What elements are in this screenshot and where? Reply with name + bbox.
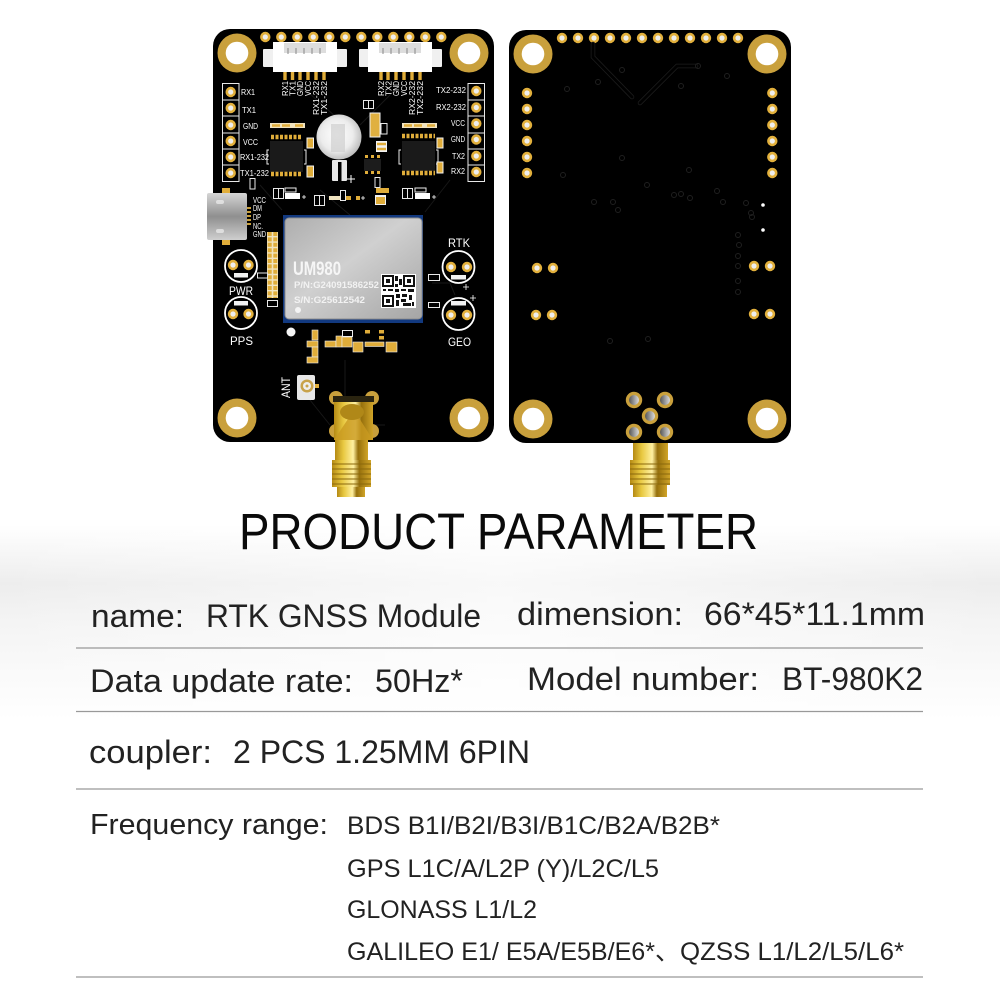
connector 1 (263, 42, 347, 80)
left pin header: VCC (243, 138, 258, 147)
right pin header: TX2-232 (436, 86, 467, 95)
SMD cluster (307, 330, 397, 363)
right pin header (436, 84, 484, 182)
left pin header (222, 84, 270, 182)
USB pin labels: DM (253, 204, 262, 213)
top edge pads (557, 33, 743, 43)
faint traces (260, 85, 455, 425)
connector 1 pin labels: RX1-232 (312, 80, 321, 115)
text block: data update rate: Data update rate: (90, 663, 353, 699)
back traces (593, 44, 696, 103)
text block: frequency range (90, 809, 904, 966)
right side pads (767, 88, 778, 178)
left pin header: TX1 (242, 106, 257, 115)
part number: P/N:G24091586252 (294, 280, 379, 290)
USB pin labels: DP (253, 213, 261, 222)
right pin header: GND (451, 135, 465, 144)
divider (76, 710, 923, 712)
left IC chip (267, 123, 306, 174)
ANT IPEX connector (279, 375, 319, 400)
text block: frequency range: GALILEO E1/ E5A/E5B/E6* (347, 938, 655, 966)
text block: dimension: dimension: (517, 596, 683, 632)
LED PPS (225, 297, 257, 348)
connector 1 pin labels: VCC (304, 81, 313, 96)
panel: PCB front view (207, 29, 494, 497)
gold pin array (267, 232, 278, 306)
connector 2 pin labels: VCC (400, 81, 409, 96)
SMA connector back (630, 440, 670, 497)
LED PPS: PPS (230, 334, 253, 348)
text block: dimension (517, 596, 925, 632)
USB pin labels: VCC (253, 196, 266, 205)
text block: frequency range: Frequency range: (90, 809, 328, 841)
USB pin labels: GND (253, 230, 266, 239)
USB-C connector (207, 188, 251, 245)
right pin header: VCC (451, 119, 465, 128)
connector 1 pin labels: TX1 (288, 80, 298, 96)
title: PRODUCT PARAMETER (239, 503, 758, 560)
mounting holes (514, 34, 786, 438)
connector 2 pin labels: GND (392, 81, 401, 96)
left side pads (522, 88, 532, 178)
text block: coupler: coupler: (89, 734, 212, 770)
small outlined parts (258, 273, 440, 308)
text block: model number: Model number: (527, 661, 759, 697)
right IC chip (399, 123, 438, 173)
pin 1 dot (295, 307, 301, 313)
text block: name: RTK GNSS Module (206, 598, 481, 634)
text block: frequency range: GLONASS L1/L2 (347, 896, 537, 924)
QR code (381, 274, 416, 308)
connector 1 pin labels (281, 80, 329, 115)
right pin header: RX2 (451, 167, 465, 176)
connector 2 pin labels: TX2 (384, 80, 394, 96)
UM980 module (283, 215, 423, 323)
board outline (509, 30, 791, 443)
module name: UM980 (293, 259, 341, 280)
LED PWR: PWR (229, 284, 253, 298)
left pin header: TX1-232 (240, 169, 270, 178)
connector 2 pin labels: RX2-232 (408, 80, 417, 115)
text block: coupler (89, 734, 530, 770)
left pin header: GND (243, 122, 258, 131)
mounting holes (218, 34, 488, 438)
LED GEO: GEO (448, 335, 471, 349)
USB pin labels: NC. (253, 222, 263, 231)
panel: PCB back view (509, 30, 791, 497)
text block: frequency range: BDS B1I/B2I/B3I/B1C/B2A/B2B* (347, 812, 720, 840)
board outline (213, 29, 494, 442)
right pin header: TX2 (452, 152, 465, 161)
vias (560, 64, 754, 344)
background band (0, 525, 1000, 720)
ANT IPEX connector: ANT (279, 376, 293, 398)
text block: frequency range: QZSS L1/L2/L5/L6* (680, 938, 904, 966)
SMA through-hole pads (626, 392, 673, 440)
text block: data update rate (90, 663, 463, 699)
text block: model number (527, 661, 923, 697)
text block: model number: BT-980K2 (782, 661, 923, 697)
LED RTK (442, 236, 474, 290)
LED RTK: RTK (448, 236, 470, 250)
SMD parts (250, 100, 443, 206)
silver capacitor (316, 114, 362, 183)
connector 2 pin labels (377, 80, 425, 115)
text block: data update rate: 50Hz* (375, 663, 463, 699)
LED through-hole pads (531, 261, 775, 320)
divider (76, 976, 923, 978)
top edge pads (260, 32, 446, 42)
text block: dimension: 66*45*11.1mm (704, 596, 925, 632)
connector 1 pin labels: GND (296, 81, 305, 96)
white fiducial dots (761, 203, 765, 232)
right pin header: RX2-232 (436, 103, 467, 112)
connector 1 pin labels: RX1 (281, 80, 290, 96)
fiducial dot (286, 328, 296, 336)
text block: frequency range: 、 (655, 938, 680, 966)
connector 2 (359, 42, 442, 80)
divider (76, 647, 923, 649)
LED PWR (225, 250, 257, 298)
LED GEO (442, 295, 476, 349)
serial number: S/N:G25612542 (294, 295, 365, 305)
USB pin labels (253, 196, 266, 239)
text block: frequency range: GPS L1C/A/L2P (Y)/L2C/L5 (347, 855, 659, 883)
connector 2 pin labels: TX2-232 (416, 80, 425, 115)
connector 1 pin labels: TX1-232 (320, 80, 329, 115)
text block: name: name: (91, 598, 184, 634)
divider (76, 788, 923, 790)
left pin header: RX1-232 (240, 153, 270, 162)
connector 2 pin labels: RX2 (377, 80, 386, 96)
text block: coupler: 2 PCS 1.25MM 6PIN (233, 734, 530, 770)
left pin header: RX1 (241, 88, 255, 97)
SMA connector front (329, 391, 379, 497)
